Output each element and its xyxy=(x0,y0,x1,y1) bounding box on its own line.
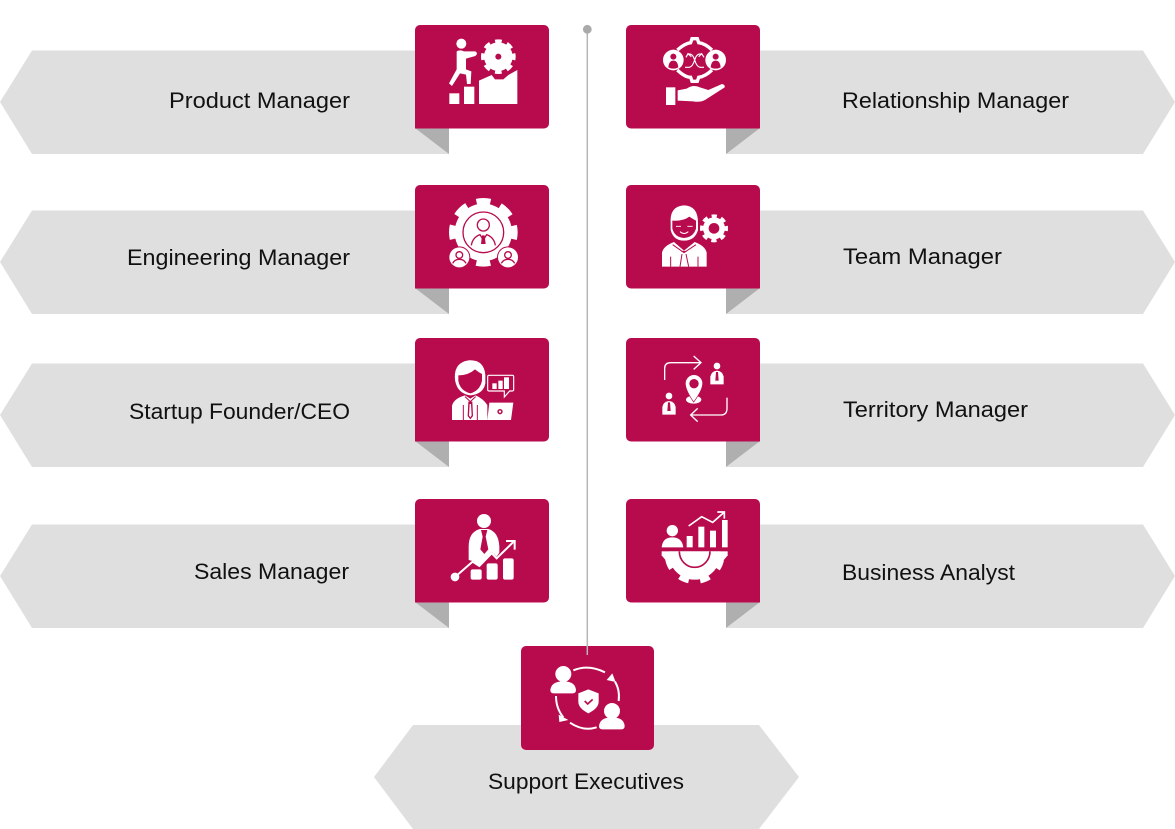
fold xyxy=(726,128,760,154)
card xyxy=(521,646,654,750)
label: Relationship Manager xyxy=(842,88,1069,113)
card xyxy=(626,25,760,128)
panel: Business Analyst xyxy=(626,499,1175,628)
icon: gear with people xyxy=(448,201,519,268)
label: Territory Manager xyxy=(843,397,1028,422)
label: Business Analyst xyxy=(842,560,1015,585)
icon: sales growth xyxy=(451,514,515,581)
panel: Sales Manager xyxy=(0,499,549,628)
label: Engineering Manager xyxy=(127,245,350,270)
panel: Engineering Manager xyxy=(0,185,549,314)
panel: Territory Manager xyxy=(626,338,1175,467)
fold xyxy=(415,288,449,314)
card xyxy=(626,185,760,288)
label: Startup Founder/CEO xyxy=(129,399,350,424)
label band xyxy=(726,50,1175,154)
fold xyxy=(726,288,760,314)
card xyxy=(415,25,549,128)
fold xyxy=(415,128,449,154)
icon: manager with gear xyxy=(662,205,726,267)
fold xyxy=(415,441,449,467)
icon: territory route xyxy=(662,356,727,422)
panel: Team Manager xyxy=(626,185,1175,314)
label band xyxy=(0,50,449,154)
icon: climbing to gear xyxy=(449,39,517,104)
connector line xyxy=(583,25,592,655)
panel: Product Manager xyxy=(0,25,549,154)
label band xyxy=(726,524,1175,628)
label: Support Executives xyxy=(488,769,684,794)
label band xyxy=(0,210,449,314)
panel: Startup Founder/CEO xyxy=(0,338,549,467)
label band xyxy=(726,364,1175,467)
connector dot xyxy=(583,25,592,34)
label: Sales Manager xyxy=(194,559,349,584)
label band xyxy=(0,364,449,467)
label: Team Manager xyxy=(843,244,1002,269)
card xyxy=(626,499,760,602)
panel: Relationship Manager xyxy=(626,25,1175,154)
card xyxy=(415,499,549,602)
label: Product Manager xyxy=(169,88,350,113)
fold xyxy=(726,602,760,628)
panel: Support Executives xyxy=(374,646,799,829)
icon: relationship hand xyxy=(663,39,726,105)
label band xyxy=(374,725,799,829)
fold xyxy=(726,441,760,467)
card xyxy=(626,338,760,442)
icon: founder with laptop xyxy=(452,360,514,420)
card xyxy=(415,185,549,288)
label band xyxy=(726,210,1175,314)
card xyxy=(415,338,549,442)
label band xyxy=(0,524,449,628)
icon: analyst with chart and gear xyxy=(662,512,728,582)
fold xyxy=(415,602,449,628)
icon: support cycle with shield xyxy=(550,666,625,729)
